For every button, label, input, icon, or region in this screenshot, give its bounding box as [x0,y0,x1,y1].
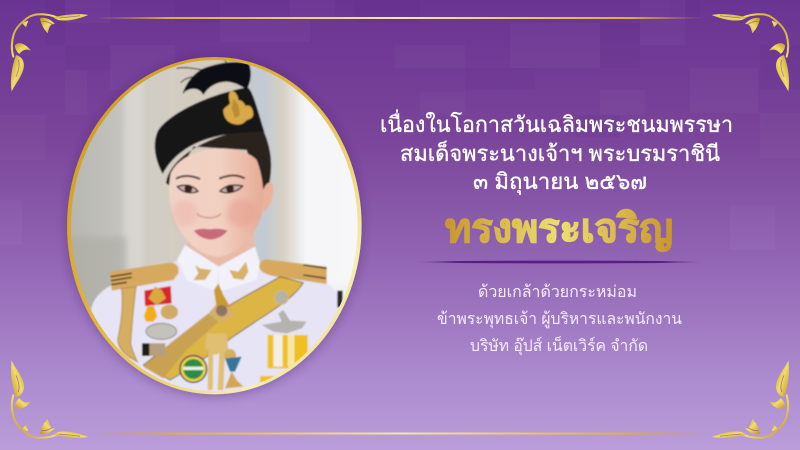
star medal [208,304,235,324]
corner ornament: top right [712,14,789,92]
neck [187,232,256,266]
ear [263,182,273,212]
medals on chest [144,306,157,322]
hair [166,131,271,190]
lips [194,229,228,239]
dedication line 2: ข้าพระพุทธเจ้า ผู้บริหารและพนักงาน [437,310,682,329]
feather plume [177,57,251,95]
collar [177,245,260,292]
corner ornament: top left [11,14,88,92]
gold title: ทรงพระเจริญ [445,207,673,252]
hat [155,87,264,174]
green round pin [180,356,207,382]
gold frame line: bottom [96,432,704,434]
right epaulette [259,259,327,284]
ribbon bar [268,335,308,368]
wings badge [262,310,307,333]
dark side detail [337,291,343,307]
left epaulette [110,263,179,291]
corner ornament: bottom left [11,360,88,438]
cheek blush [227,199,257,227]
uniform body [90,260,339,392]
portrait photo [71,60,358,392]
portrait medallion [60,50,370,400]
heading line 1: เนื่องในโอกาสวันเฉลิมพระชนมพรรษา [380,109,733,137]
dedication text [437,283,682,356]
collar pins [193,262,248,280]
heading: occasion text [380,109,733,195]
hat badge [223,91,253,125]
sash braid [143,313,218,378]
medallion shadow [66,56,363,397]
divider [416,261,704,263]
gold ring [67,57,362,394]
eyebrows [177,176,244,179]
round pin on sash [274,290,288,304]
dedication line 1: ด้วยเกล้าด้วยกระหม่อม [478,283,637,301]
corner ornament: bottom right [712,360,789,438]
heading line 3: ๓ มิถุนายน ๒๕๖๗ [473,169,647,195]
hanging decoration [225,357,242,372]
dedication line 3: บริษัท อุ๊ปส์ เน็ตเวิร์ค จำกัด [470,335,648,356]
face [169,149,263,257]
eyes [177,185,243,193]
heading line 2: สมเด็จพระนางเจ้าฯ พระบรมราชินี [400,139,720,166]
shoulder cord [118,287,137,362]
gold sash [143,277,303,380]
gold frame line: top [96,17,704,19]
red badge [144,286,172,306]
nose [197,214,221,218]
